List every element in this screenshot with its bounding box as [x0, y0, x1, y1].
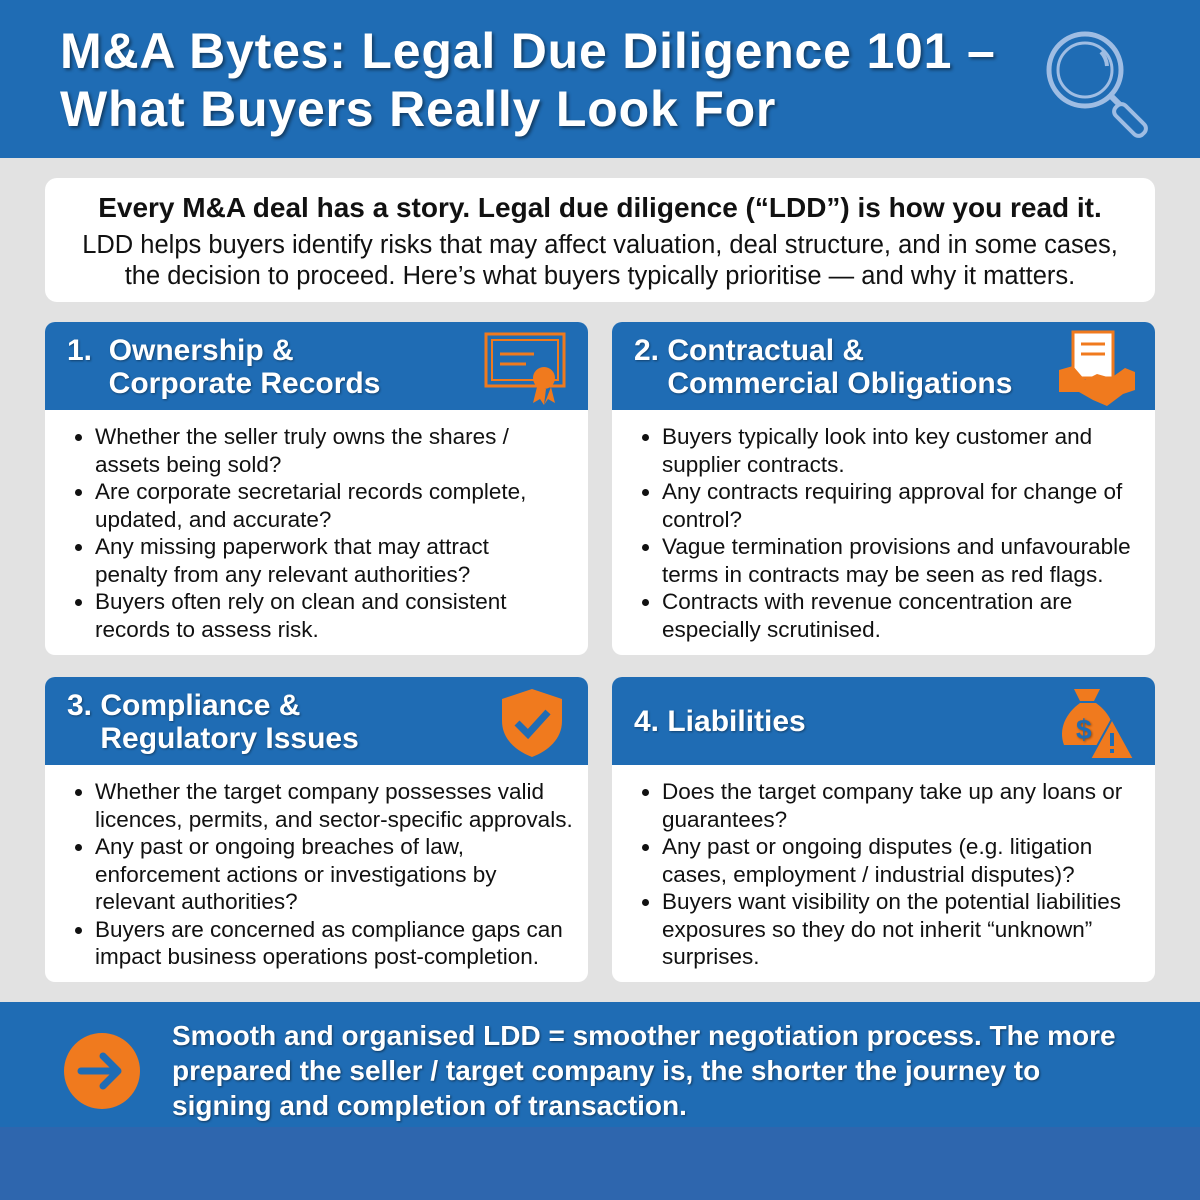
panel: liabilities: Does the target company take up any loans or [662, 779, 1122, 804]
panel: liabilities: cases, employment / industrial disputes)? [662, 862, 1075, 886]
panel: contractual: especially scrutinised. [662, 616, 881, 642]
panel: compliance: 3. Compliance & [67, 689, 300, 722]
panel: liabilities: exposures so they do not inherit “unknown” [662, 916, 1092, 942]
panel: ownership: penalty from any relevant authorities? [95, 562, 470, 586]
panel: contractual: supplier contracts. [662, 452, 845, 476]
panel: contractual: terms in contracts may be seen as red flags. [662, 562, 1103, 586]
panel: compliance: Whether the target company possesses valid [95, 779, 544, 804]
panel: contractual: Commercial Obligations [667, 367, 1012, 400]
footer text: signing and completion of transaction. [172, 1090, 687, 1121]
panel: compliance [45, 677, 588, 982]
panel: contractual: Contracts with revenue concentration are [662, 589, 1072, 614]
panel: compliance: licences, permits, and sector-specific approvals. [95, 806, 573, 832]
panel: contractual: 2. Contractual & [634, 334, 864, 367]
panel: contractual: Any contracts requiring approval for change of [662, 479, 1122, 504]
panel: ownership: Whether the seller truly owns the shares / [95, 424, 509, 449]
title [60, 23, 998, 140]
icon: magnifying glass [1046, 32, 1148, 138]
panel: liabilities [612, 677, 1155, 982]
panel: liabilities: surprises. [662, 944, 760, 969]
panel: compliance: impact business operations post-completion. [95, 944, 539, 969]
panel: compliance: Any past or ongoing breaches of law, [95, 834, 464, 859]
header band [0, 0, 1200, 158]
panel: ownership: Corporate Records [109, 367, 380, 400]
panel: ownership [45, 322, 588, 655]
panel: contractual: Buyers typically look into key customer and [662, 424, 1092, 449]
intro card: Every M&A deal has a story. Legal due diligence (“LDD”) is how you read it. [98, 192, 1102, 223]
panel: ownership: assets being sold? [95, 452, 281, 476]
panel: liabilities: 4. Liabilities [634, 705, 806, 738]
panel: ownership: Are corporate secretarial records complete, [95, 479, 526, 504]
panel: liabilities: Buyers want visibility on the potential liabilities [662, 889, 1121, 914]
panel: liabilities: Any past or ongoing disputes (e.g. litigation [662, 834, 1092, 859]
panel: compliance: relevant authorities? [95, 889, 298, 914]
panel: contractual: Vague termination provisions and unfavourable [662, 534, 1131, 559]
footer text: prepared the seller / target company is, the shorter the journey to [172, 1055, 1040, 1086]
footer text [172, 1020, 1117, 1124]
panel: ownership: records to assess risk. [95, 616, 319, 642]
panel: compliance: Buyers are concerned as compliance gaps can [95, 916, 563, 942]
footer band [0, 1002, 1200, 1200]
title: M&A Bytes: Legal Due Diligence 101 – [60, 23, 996, 79]
panel: ownership: 1. Ownership & [67, 334, 294, 367]
panel: ownership: Any missing paperwork that may attract [95, 534, 489, 559]
intro card: LDD helps buyers identify risks that may affect valuation, deal structure, and in some cases, [82, 231, 1118, 259]
intro card: the decision to proceed. Here’s what buyers typically prioritise — and why it matters. [125, 262, 1075, 290]
panel: liabilities: $ [1076, 714, 1092, 745]
panel: ownership: updated, and accurate? [95, 506, 331, 532]
title: What Buyers Really Look For [60, 81, 776, 137]
icon: arrow circle [64, 1033, 140, 1109]
panel: liabilities: guarantees? [662, 806, 787, 832]
panel: contractual: control? [662, 506, 742, 532]
panel: compliance: enforcement actions or investigations by [95, 862, 496, 886]
panel: contractual [612, 322, 1155, 655]
panel: compliance: Regulatory Issues [100, 722, 359, 755]
panel: ownership: Buyers often rely on clean and consistent [95, 589, 506, 614]
intro card [45, 178, 1155, 302]
footer text: Smooth and organised LDD = smoother negotiation process. The more [172, 1020, 1116, 1051]
